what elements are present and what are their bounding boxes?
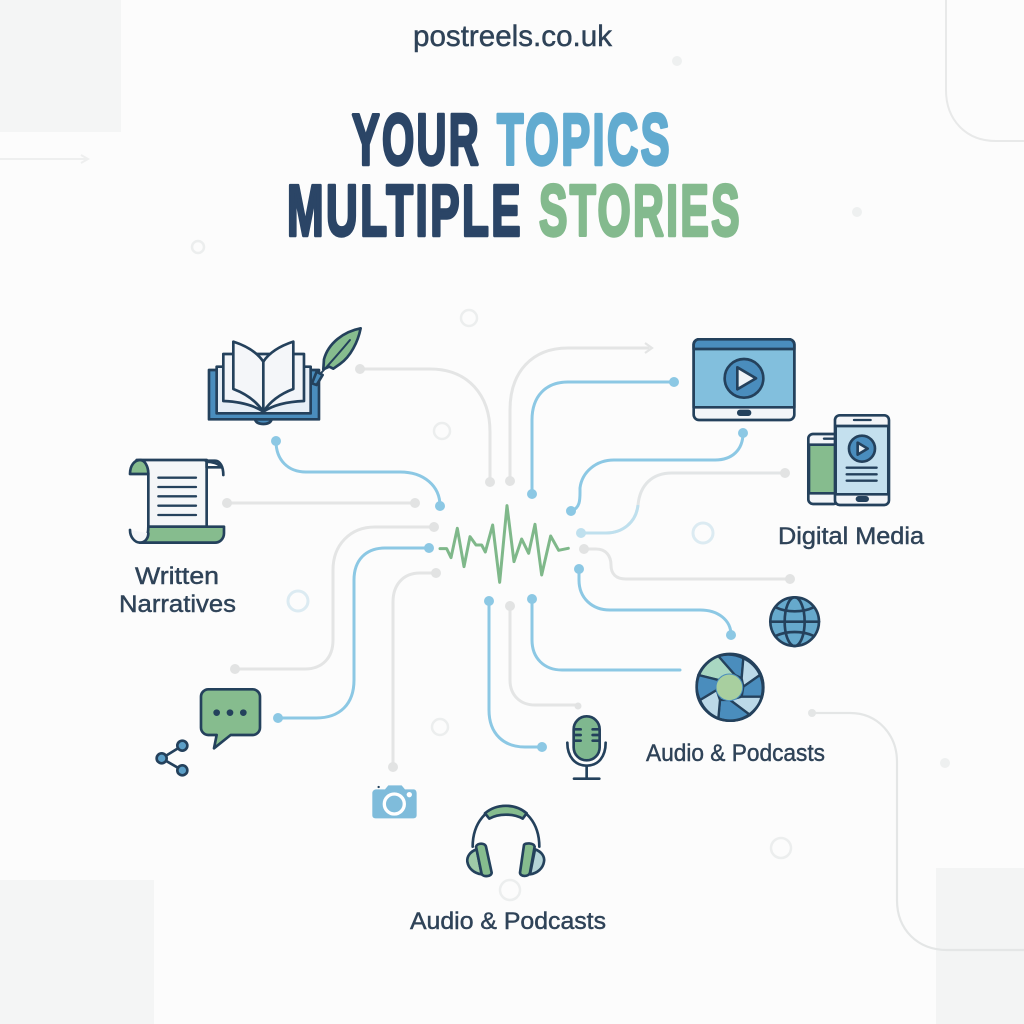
icon: chat bubble	[201, 689, 260, 748]
title	[287, 100, 742, 252]
icon: globe	[770, 597, 819, 646]
icon: video player	[694, 339, 794, 420]
icon: share nodes	[157, 741, 187, 775]
label: digital media: Digital Media	[778, 523, 925, 550]
icon: camera	[372, 785, 417, 818]
title: STORIES	[539, 172, 742, 252]
icon: sound waveform	[440, 506, 568, 582]
icon: microphone	[567, 716, 606, 779]
icon: paper scroll	[130, 460, 224, 543]
connector lines hub	[222, 343, 795, 772]
label: audio and podcasts bottom: Audio & Podcasts	[410, 908, 606, 935]
label: written narratives: Narratives	[119, 591, 236, 618]
icon: phones	[808, 415, 889, 505]
label: written narratives: Written	[135, 563, 219, 590]
title: TOPICS	[497, 100, 672, 180]
label: written narratives	[119, 563, 236, 618]
icon: headphones	[467, 806, 544, 876]
title: YOUR	[352, 100, 481, 180]
label: audio and podcasts right: Audio & Podcasts	[646, 740, 825, 767]
site url heading: postreels.co.uk	[413, 20, 613, 53]
title: MULTIPLE	[287, 172, 523, 252]
icon: open book with quill	[209, 328, 361, 424]
icon: camera aperture	[697, 654, 763, 721]
